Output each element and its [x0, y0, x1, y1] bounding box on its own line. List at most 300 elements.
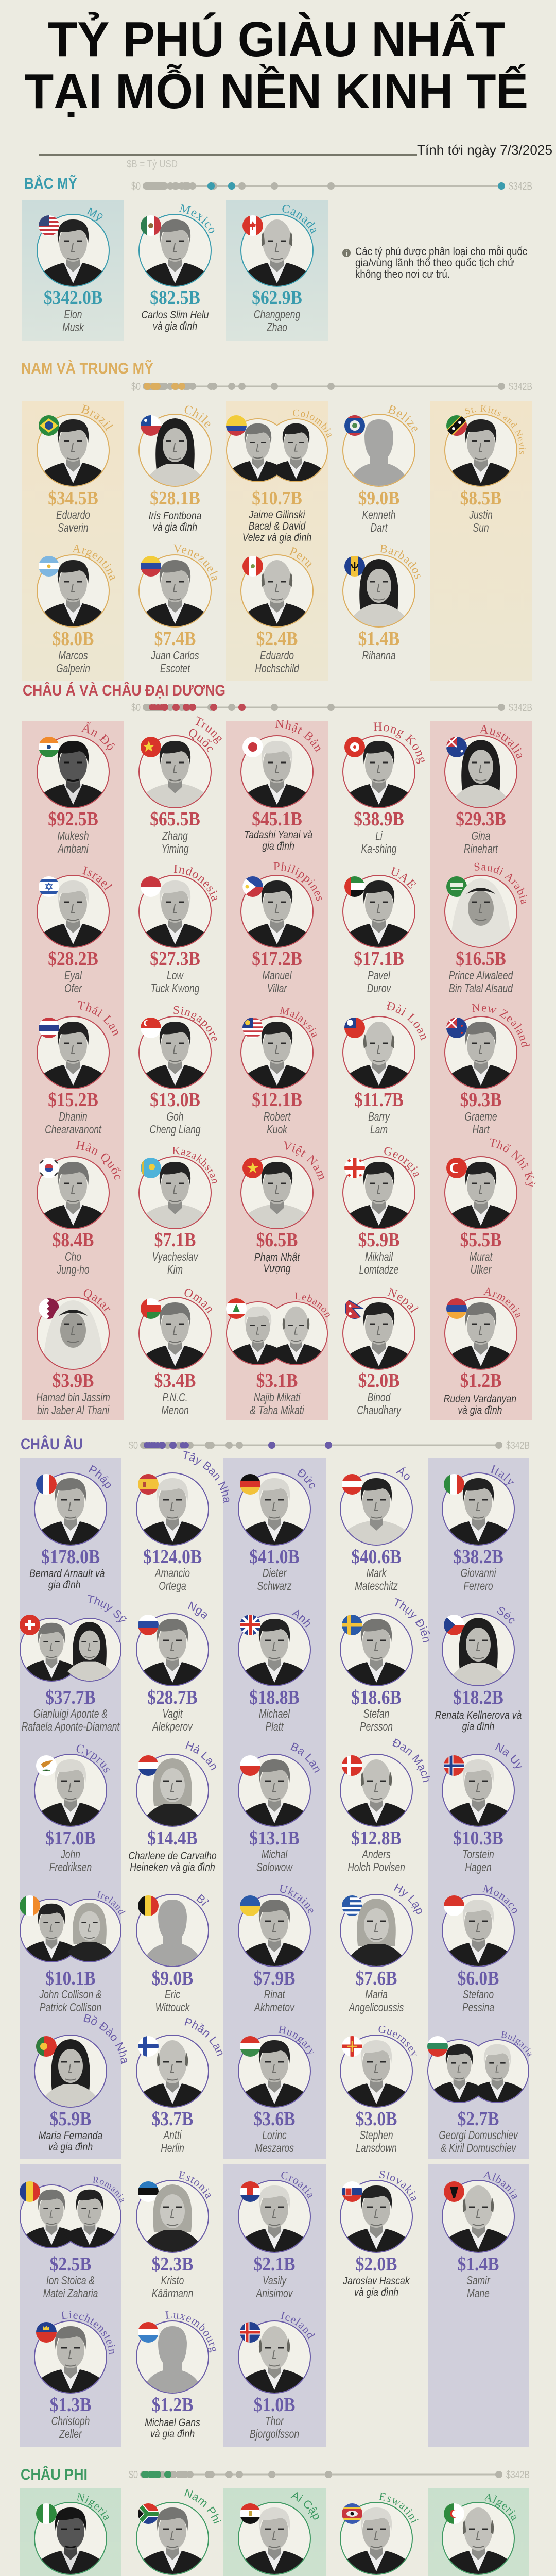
card: Iris Fontbona — [138, 406, 212, 533]
name: Hagen — [465, 1861, 492, 1874]
flag: Colombia — [226, 415, 247, 436]
wealth scale: Bắc Mỹ: $0 — [131, 181, 141, 192]
country: Philippines — [274, 862, 322, 901]
section: Châu Phi — [20, 2466, 530, 2576]
name: Elon — [64, 309, 82, 321]
country: Nam Phi — [183, 2486, 223, 2526]
country: Hungary — [277, 2023, 319, 2057]
card: Maria Fernanda — [34, 2011, 132, 2153]
name: Murat — [470, 1251, 492, 1264]
name: Schwarz — [257, 1580, 291, 1593]
info note — [342, 246, 527, 280]
card: Michal Solowow — [238, 1740, 324, 1874]
net worth: $16.5B — [456, 947, 506, 969]
portrait — [349, 419, 409, 486]
name: Villar — [267, 982, 287, 995]
name: Carlos Slim Helu — [141, 309, 209, 321]
name: Dieter — [263, 1567, 286, 1580]
country: Ireland — [96, 1889, 127, 1917]
card: Michael Platt — [238, 1606, 315, 1734]
net worth: $62.9B — [252, 286, 302, 308]
net worth: $27.3B — [150, 947, 200, 969]
portrait — [238, 2040, 310, 2107]
portrait — [450, 878, 512, 947]
card: Mukesh Ambani — [37, 722, 115, 856]
net worth: $5.5B — [460, 1229, 501, 1250]
name: và gia đình — [150, 2428, 195, 2440]
net worth: $18.2B — [453, 1686, 503, 1708]
card: Zhang Yiming: Quốc — [189, 728, 213, 752]
name: Gianluigi Aponte & — [33, 1708, 108, 1721]
name: Rinat — [264, 1989, 285, 2002]
net worth: $1.2B — [460, 1369, 501, 1391]
name: và gia đình — [153, 521, 197, 533]
name: Yiming — [161, 843, 189, 856]
wealth scale: Nam và Trung Mỹ — [131, 381, 532, 393]
flag: Algeria — [444, 2503, 464, 2524]
name: Dhanin — [59, 1111, 88, 1124]
country: Oman — [182, 1285, 217, 1316]
name: Iris Fontbona — [149, 510, 201, 522]
card: Cho Jung-ho — [37, 1139, 125, 1277]
net worth: $10.1B — [45, 1967, 96, 1989]
name: Matei Zaharia — [43, 2287, 98, 2300]
name: Ka-shing — [361, 843, 397, 856]
net worth: $2.7B — [458, 2108, 499, 2129]
card: Changpeng Zhao — [240, 205, 316, 334]
portrait — [37, 560, 109, 627]
flag: Bulgaria — [427, 2036, 448, 2057]
portrait — [442, 1900, 514, 1967]
portrait — [136, 1478, 208, 1545]
flag: Hy Lạp — [342, 1895, 362, 1916]
portraits — [227, 423, 327, 482]
column bands — [22, 200, 328, 341]
card: Antti Herlin — [136, 2015, 227, 2155]
portrait — [139, 1302, 211, 1369]
name: John — [61, 1849, 80, 1861]
portrait — [340, 1619, 412, 1686]
portrait — [139, 880, 211, 947]
name: Eyal — [64, 970, 82, 982]
flag: Israel — [39, 876, 59, 897]
net worth: $18.8B — [249, 1686, 300, 1708]
name: Lansdown — [356, 2142, 397, 2155]
country: Ukraine — [278, 1882, 319, 1916]
portrait — [238, 2185, 310, 2252]
wealth scale: Châu Á: $0 — [131, 702, 141, 714]
card: Issad Rebrab — [442, 2490, 522, 2576]
name: gia đình — [48, 1579, 81, 1591]
country: Việt Nam — [282, 1139, 329, 1182]
section: Bắc Mỹ — [22, 175, 532, 341]
name: Wittouck — [155, 2002, 190, 2014]
net worth: $8.5B — [460, 487, 501, 509]
name: Tuck Kwong — [151, 982, 200, 995]
name: Goh — [166, 1111, 184, 1124]
card: Dieter Schwarz — [238, 1466, 320, 1593]
card: Stefano Pessina — [442, 1882, 523, 2014]
flag: Ireland — [20, 1895, 40, 1916]
net worth: $13.1B — [249, 1827, 300, 1849]
name: & Kiril Domuschiev — [441, 2142, 517, 2155]
country: St. Kitts and Nevis — [465, 405, 526, 454]
name: Herlin — [161, 2142, 184, 2155]
name: Vượng — [263, 1263, 291, 1275]
card: Phạm Nhật Vượng — [241, 1139, 329, 1275]
wealth scale: Nam và Trung Mỹ: $342B — [509, 381, 532, 393]
portrait — [37, 419, 109, 486]
flag: Malaysia — [242, 1018, 263, 1038]
portrait — [442, 2185, 514, 2252]
flag: Phần Lan — [138, 2036, 159, 2057]
flag: Lebanon — [226, 1298, 247, 1319]
country: Nepal — [386, 1285, 421, 1316]
card: John Fredriksen — [34, 1742, 114, 1874]
portrait — [141, 1758, 204, 1826]
net worth: $38.9B — [354, 808, 404, 829]
name: Bacal & David — [249, 520, 306, 532]
country: Guernsey — [377, 2023, 422, 2059]
name: & Taha Mikati — [250, 1404, 304, 1417]
name: Galperin — [56, 663, 90, 675]
flag: Thổ Nhĩ Kỳ — [446, 1158, 467, 1178]
portraits — [428, 2044, 529, 2103]
flag: UAE — [344, 876, 365, 897]
name: Zeller — [59, 2428, 82, 2441]
portraits — [20, 2190, 121, 2248]
flag: Séc — [444, 1615, 464, 1635]
portrait — [445, 1162, 517, 1229]
net worth: $40.6B — [351, 1546, 402, 1567]
flag: Anh — [240, 1615, 260, 1635]
portrait — [37, 880, 109, 947]
net worth: $28.7B — [147, 1686, 198, 1708]
net worth: $28.1B — [150, 487, 200, 509]
card: Rihanna — [342, 544, 421, 663]
card: Ruben Vardanyan — [444, 1284, 526, 1416]
country: Lebanon — [294, 1291, 334, 1320]
portrait — [241, 560, 313, 627]
card: Gina Rinehart — [445, 723, 527, 856]
country: Hàn Quốc — [75, 1139, 125, 1182]
net worth: $41.0B — [249, 1546, 300, 1567]
name: Kuok — [267, 1124, 288, 1137]
flag: Belize — [344, 415, 365, 436]
portrait — [238, 2507, 310, 2574]
flag: Armenia — [446, 1298, 467, 1319]
card: Goh Cheng Liang — [139, 1004, 222, 1137]
country: Israel — [82, 866, 112, 891]
wealth scale: Châu Phi: $0 — [129, 2469, 138, 2481]
name: Bjorgolfsson — [250, 2428, 299, 2441]
name: Vyacheslav — [152, 1251, 198, 1264]
country: Colombia — [293, 409, 332, 438]
name: Ambani — [58, 843, 89, 856]
name: Dart — [371, 522, 388, 535]
column bands — [20, 1458, 529, 2447]
name: Menon — [161, 1404, 189, 1417]
net worth: $82.5B — [150, 286, 200, 308]
portrait — [344, 1899, 408, 1967]
portrait — [139, 741, 211, 808]
flag: Romania — [20, 2181, 40, 2202]
name: và gia đình — [153, 320, 197, 332]
country: Mexico — [179, 204, 214, 233]
name: Vasily — [263, 2275, 286, 2287]
name: Najib Mikati — [254, 1392, 300, 1404]
card: Amancio Ortega — [136, 1448, 234, 1593]
card: Anders Holch Povlsen — [340, 1736, 433, 1874]
name: Giovanni — [461, 1567, 496, 1580]
flag: Ba Lan — [240, 1755, 260, 1776]
flag: Peru — [242, 556, 263, 577]
wealth scale: Châu Phi — [129, 2469, 530, 2481]
country: Romania — [92, 2174, 128, 2204]
name: và gia đình — [48, 2141, 93, 2153]
country: Nigeria — [75, 2490, 114, 2523]
country: Hong Kong — [374, 722, 425, 764]
name: Ion Stoica & — [46, 2275, 95, 2287]
net worth: $17.1B — [354, 947, 404, 969]
card: Michael Gans — [136, 2308, 221, 2440]
net worth: $34.5B — [48, 487, 98, 509]
card: Stefan Persson — [340, 1596, 433, 1734]
net worth: $10.7B — [252, 487, 302, 509]
name: Eduardo — [56, 509, 90, 522]
card: Zhang Yiming — [138, 716, 222, 856]
name: Marcos — [58, 650, 88, 663]
portrait — [42, 1300, 104, 1369]
name: Platt — [266, 1721, 284, 1734]
flag: Trung Quốc — [141, 737, 161, 757]
name: Binod — [368, 1392, 390, 1404]
country: Barbados — [379, 544, 421, 579]
card: Gianluigi & Rafaela Aponte — [20, 1592, 129, 1734]
portrait — [343, 880, 415, 947]
name: Stefan — [363, 1708, 389, 1721]
title — [24, 11, 528, 119]
net worth: $17.0B — [45, 1827, 96, 1849]
card: Juan Carlos Escotet — [138, 544, 218, 675]
card: Manuel Villar — [241, 860, 327, 995]
wealth scale: Châu Phi: $342B — [506, 2469, 530, 2481]
net worth: $9.0B — [152, 1967, 193, 1989]
country: Belize — [387, 405, 418, 432]
flag: Nhật Bản — [242, 737, 263, 757]
name: Musk — [62, 321, 84, 334]
name: Escotet — [160, 663, 190, 675]
country: Séc — [495, 1603, 519, 1626]
heading: Châu Âu: CHÂU ÂU — [21, 1435, 83, 1453]
portrait — [442, 1478, 514, 1545]
flag: Hungary — [240, 2036, 260, 2057]
flag: Thái Lan — [39, 1018, 59, 1038]
portrait — [343, 1022, 415, 1089]
card: Eyal Ofer — [37, 864, 115, 995]
country: Đức — [295, 1466, 320, 1491]
name: Lorinc — [262, 2129, 287, 2142]
info note: gia/vùng lãnh thổ theo quốc tịch chứ — [355, 257, 514, 269]
name: Michal — [262, 1849, 287, 1861]
portrait — [343, 1302, 415, 1369]
name: Sun — [473, 522, 489, 535]
card: Christoph Zeller — [34, 2308, 119, 2441]
portrait — [37, 219, 109, 286]
country: Nhật Bản — [275, 720, 320, 752]
portrait — [37, 1162, 109, 1229]
portrait — [136, 1619, 208, 1686]
unit note: $B = Tỷ USD — [127, 159, 178, 170]
heading: Nam và Trung Mỹ: NAM VÀ TRUNG MỸ — [21, 360, 153, 377]
heading: Châu Phi: CHÂU PHI — [21, 2466, 88, 2483]
name: Phạm Nhật — [254, 1251, 300, 1263]
flag: St. Kitts and Nevis — [446, 415, 467, 436]
name: Amancio — [155, 1567, 190, 1580]
portrait — [449, 740, 513, 808]
card: Vagit Alekperov — [136, 1599, 212, 1734]
name: Chearavanont — [45, 1124, 102, 1137]
portrait — [446, 1618, 510, 1686]
portrait — [34, 2326, 107, 2393]
portrait — [238, 1900, 310, 1967]
flag: Nga — [138, 1615, 159, 1635]
name: Bernard Arnault và — [29, 1568, 105, 1580]
name: Hart — [473, 1124, 490, 1137]
net worth: $2.0B — [358, 1369, 399, 1391]
net worth: $2.3B — [152, 2253, 193, 2275]
name: Angelicoussis — [349, 2002, 404, 2014]
flag: Đức — [240, 1474, 260, 1495]
name: Jung-ho — [57, 1264, 90, 1277]
flag: Cyprus — [36, 1755, 57, 1776]
net worth: $7.9B — [254, 1967, 295, 1989]
name: Michael — [259, 1708, 290, 1721]
country: Bồ Đào Nha — [82, 2011, 132, 2065]
card: Prince Alwaleed — [445, 860, 532, 995]
flag: Ai Cập — [240, 2503, 260, 2524]
wealth scale: Châu Á — [131, 702, 532, 714]
country: Canada — [282, 205, 316, 234]
country: Qatar — [81, 1286, 114, 1315]
country: Eswatini — [378, 2489, 422, 2526]
name: Rinehart — [464, 843, 498, 856]
portrait — [445, 419, 517, 486]
country: Argentina — [72, 545, 115, 581]
portrait — [238, 1619, 310, 1686]
country: Thụy Sỹ — [86, 1592, 129, 1625]
card: Georgi & Kiril Domuschiev — [427, 2029, 536, 2155]
portrait — [238, 2326, 310, 2393]
country: Thổ Nhĩ Kỳ — [488, 1136, 538, 1189]
portrait — [139, 560, 211, 627]
card: Murat Ulker — [445, 1136, 538, 1277]
net worth: $5.9B — [358, 1229, 399, 1250]
name: Patrick Collison — [40, 2002, 101, 2014]
net worth: $9.3B — [460, 1089, 501, 1110]
wealth scale: Bắc Mỹ — [131, 181, 532, 192]
card: Ion Stoica & Matei Zaharia — [20, 2174, 128, 2300]
name: Zhao — [266, 321, 287, 334]
country: Liechtenstein — [60, 2308, 119, 2355]
flag: Tây Ban Nha — [138, 1474, 159, 1495]
wealth scale: Châu Âu: $342B — [506, 1440, 530, 1451]
name: Charlene de Carvalho — [128, 1850, 217, 1862]
name: Ofer — [64, 982, 82, 995]
flag: Guernsey — [342, 2036, 362, 2057]
flag: Nam Phi — [138, 2503, 159, 2524]
card: P.N.C. Menon — [139, 1285, 217, 1417]
net worth: $3.7B — [152, 2108, 193, 2129]
flag: Đài Loan — [344, 1018, 365, 1038]
name: Mikhail — [365, 1251, 393, 1264]
country: Đan Mạch — [391, 1736, 433, 1784]
flag: Australia — [446, 737, 467, 757]
card: Robert Kuok — [241, 1004, 322, 1137]
flag: Liechtenstein — [36, 2322, 57, 2343]
country: Italy — [489, 1463, 518, 1489]
portrait — [241, 880, 313, 947]
country: Singapore — [173, 1004, 222, 1043]
card: Giovanni Ferrero — [442, 1463, 518, 1593]
country: Kazakhstan — [172, 1144, 222, 1185]
info note: không theo nơi cư trú. — [355, 268, 450, 280]
section: Nam và Trung Mỹ — [21, 360, 532, 681]
wealth scale: Châu Á: $342B — [509, 702, 532, 714]
card: Torstein Hagen — [442, 1740, 526, 1874]
name: Kim — [167, 1264, 183, 1277]
flag: Chile — [141, 415, 161, 436]
flag: Pháp — [36, 1474, 57, 1495]
country: Estonia — [177, 2168, 216, 2201]
card: Tadashi Yanai — [241, 718, 325, 852]
name: Torstein — [462, 1849, 494, 1861]
country: Armenia — [483, 1284, 526, 1320]
name: Lomtadze — [359, 1264, 398, 1277]
name: Stephen — [359, 2129, 393, 2142]
portrait — [238, 1478, 310, 1545]
country: Slovakia — [378, 2167, 422, 2204]
section: Châu Âu — [20, 1435, 536, 2447]
net worth: $1.4B — [458, 2253, 499, 2275]
net worth: $18.6B — [351, 1686, 402, 1708]
country: Mỹ — [87, 207, 103, 222]
flag: Áo — [342, 1474, 362, 1495]
wealth scale: Bắc Mỹ: $342B — [509, 181, 532, 192]
name: Justin — [469, 509, 493, 522]
name: Mane — [467, 2287, 490, 2300]
net worth: $2.4B — [256, 628, 298, 649]
card: Binod Chaudhary — [343, 1285, 421, 1417]
heading: Châu Á và Châu Đại Dương: CHÂU Á VÀ CHÂU ĐẠI DƯƠNG — [23, 682, 225, 699]
card: Rinat Akhmetov — [238, 1882, 319, 2014]
net worth: $12.8B — [351, 1827, 402, 1849]
card: Jaroslav Hascak — [340, 2167, 422, 2298]
country: Bulgaria — [500, 2029, 536, 2059]
portrait — [34, 1759, 107, 1826]
name: Samir — [466, 2275, 490, 2287]
portrait — [136, 2507, 208, 2574]
country: Anh — [290, 1606, 315, 1630]
portrait — [347, 559, 411, 627]
card: Samir Mane — [442, 2168, 523, 2300]
country: Cyprus — [75, 1742, 114, 1775]
name: Kristo — [161, 2275, 184, 2287]
card: Eduardo Saverin — [37, 404, 113, 535]
portraits — [20, 1622, 117, 1681]
flag: Saudi Arabia — [446, 876, 467, 897]
net worth: $12.1B — [252, 1089, 302, 1110]
